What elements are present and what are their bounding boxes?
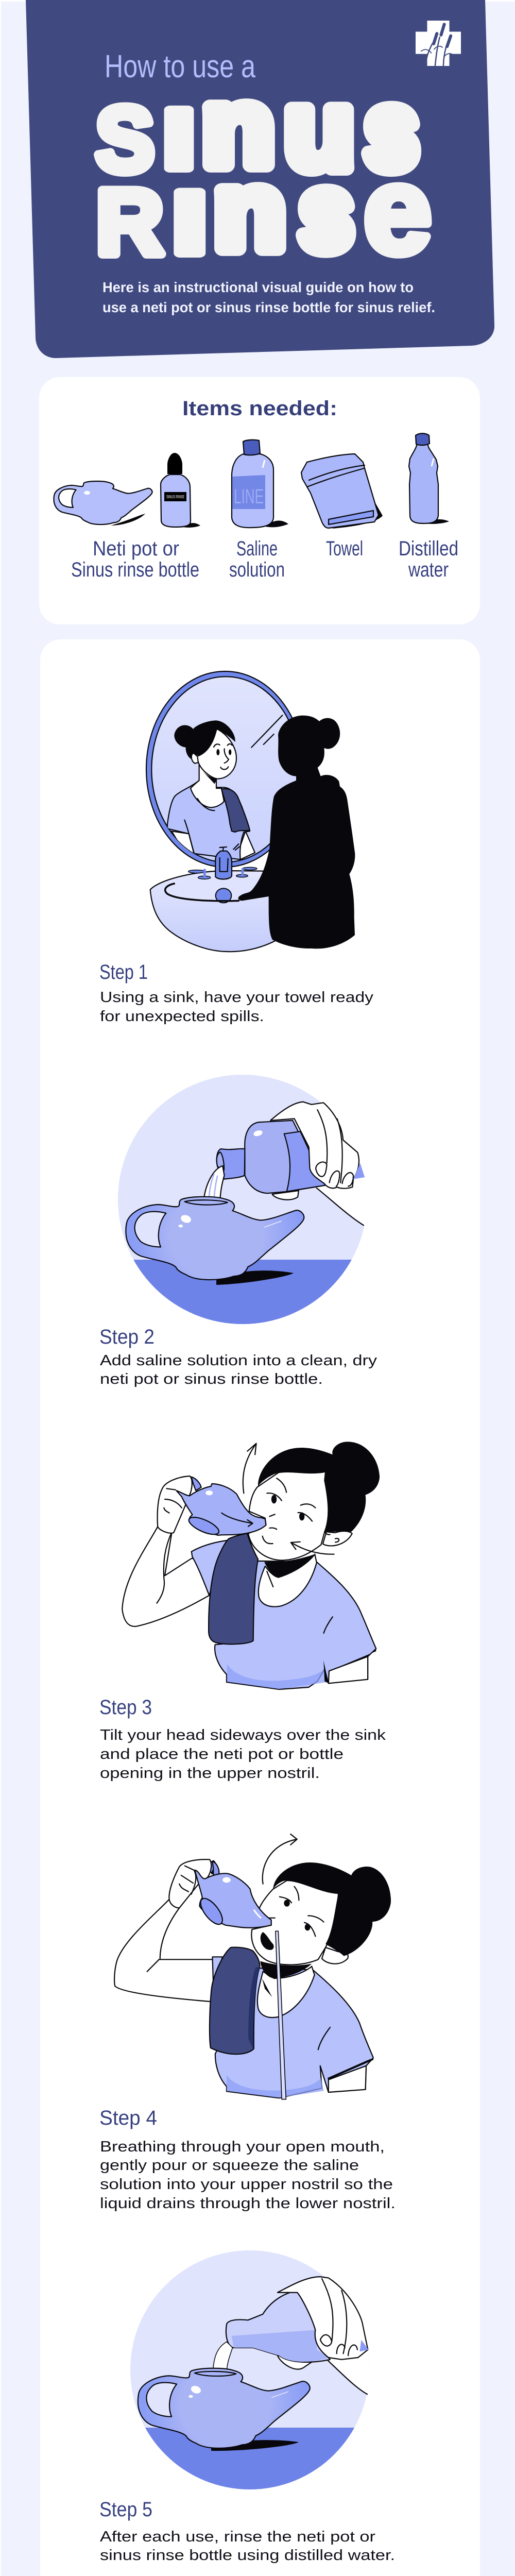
text: step 3: Tilt your head sideways over the sink — [100, 1727, 386, 1743]
text: How to use a: How to use a — [105, 49, 255, 84]
text: step 3: opening in the upper nostril. — [100, 1765, 320, 1782]
text: step 4: Breathing through your open mouth, — [100, 2139, 385, 2155]
text: step 4: solution into your upper nostril so the — [100, 2176, 393, 2193]
text: step 2: neti pot or sinus rinse bottle. — [100, 1371, 323, 1387]
text: step 3: Step 3 — [99, 1696, 152, 1719]
illustration: step 2 pouring saline into neti pot — [118, 1075, 370, 1327]
title: Sinus Rinse: s — [365, 68, 419, 192]
text: header intro — [102, 279, 435, 315]
icon: towel — [301, 454, 383, 529]
title: Sinus Rinse: I — [171, 173, 208, 272]
text: step 4 — [99, 2107, 396, 2212]
icon: distilled water — [409, 433, 449, 524]
icon: saline bottle — [232, 440, 288, 528]
text: step 1 — [99, 961, 374, 1025]
title: Sinus Rinse: R — [96, 171, 163, 274]
labels: items: solution — [229, 558, 285, 581]
text: step 4: liquid drains through the lower nostril. — [100, 2195, 396, 2212]
title: Sinus Rinse: s — [299, 152, 353, 273]
title: Sinus Rinse: I — [162, 92, 196, 187]
panel: header banner — [26, 0, 494, 358]
icon: sinus rinse bottle: SINUS RINSE — [166, 495, 184, 499]
title: Sinus Rinse: e — [364, 141, 432, 279]
text: step 5 — [99, 2498, 395, 2564]
panel: steps — [40, 639, 480, 2576]
labels: items: Neti pot or — [93, 537, 179, 560]
text: step 2 — [99, 1326, 377, 1387]
text: step 5: After each use, rinse the neti pot or — [100, 2529, 375, 2545]
labels: items: Saline — [236, 537, 278, 560]
illustration: step 3 tilted head with neti pot — [122, 1442, 380, 1689]
silhouette: woman from behind — [238, 716, 355, 948]
text: step 4: gently pour or squeeze the saline — [100, 2157, 359, 2174]
text: step 3: and place the neti pot or bottle — [100, 1746, 344, 1762]
title: Sinus Rinse: n — [214, 150, 285, 272]
text: step 2: Step 2 — [99, 1326, 154, 1348]
title: Sinus Rinse: S — [96, 89, 154, 191]
text: step 1: Step 1 — [99, 961, 148, 984]
icon: neti pot — [54, 481, 152, 526]
labels: items: Towel — [326, 537, 363, 560]
text: step 2: Add saline solution into a clean, dry — [100, 1352, 377, 1369]
heading: items needed: Items needed: — [182, 397, 337, 420]
illustration: step 4 pouring through nostril — [114, 1834, 391, 2099]
labels: items: Sinus rinse bottle — [71, 558, 199, 581]
icon: sinus rinse bottle — [161, 453, 200, 528]
logo: Marshfield Clinic cross — [416, 21, 461, 67]
text: step 5: Step 5 — [99, 2498, 152, 2521]
labels: items: Distilled — [399, 537, 458, 560]
illustration: step 5 rinsing with distilled water — [130, 2250, 372, 2492]
text: step 4: Step 4 — [99, 2107, 157, 2129]
text: step 5: sinus rinse bottle using distilled water. — [100, 2547, 395, 2564]
text: header intro: Here is an instructional visual guide on how to — [102, 279, 414, 295]
text: step 3 — [99, 1696, 386, 1782]
labels: items: water — [408, 558, 449, 581]
text: step 1: Using a sink, have your towel ready — [100, 989, 374, 1006]
title: Sinus Rinse: u — [285, 68, 354, 192]
illustration: step 1 woman at mirror and sink — [146, 671, 355, 952]
text: step 1: for unexpected spills. — [100, 1008, 264, 1025]
icon: saline bottle: LINE — [234, 485, 264, 508]
panel: items needed — [39, 377, 480, 624]
text: header intro: use a neti pot or sinus rinse bottle for sinus relief. — [102, 299, 435, 315]
title: Sinus Rinse — [96, 66, 432, 279]
labels: items — [71, 537, 458, 581]
title: Sinus Rinse: n — [202, 66, 274, 188]
